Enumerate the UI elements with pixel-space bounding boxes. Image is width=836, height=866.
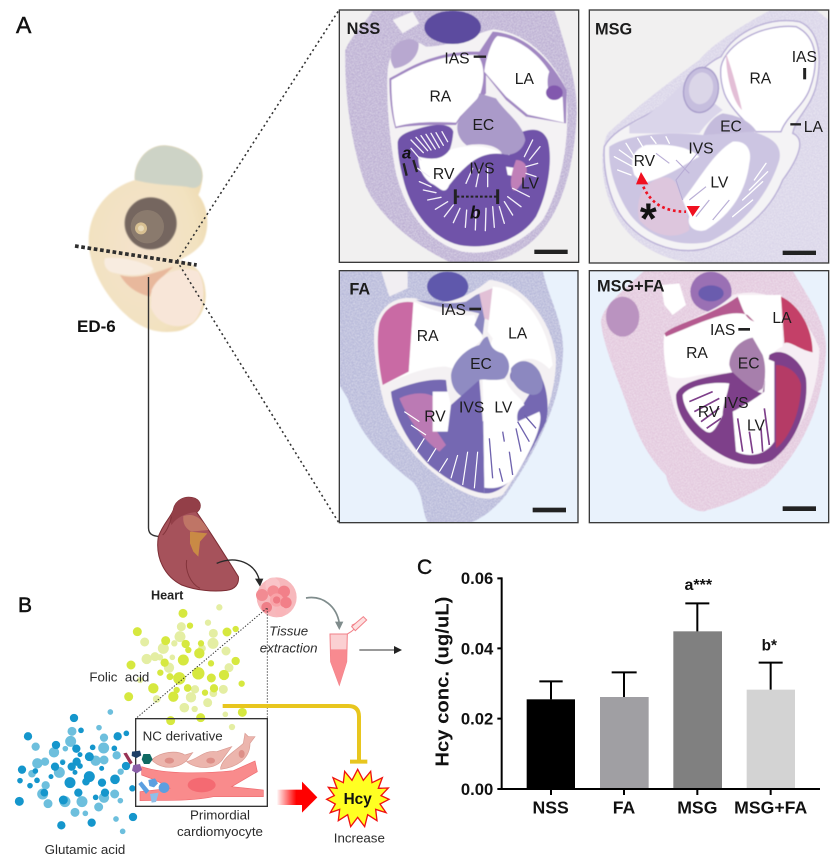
y tick labels: 0.00 bbox=[461, 780, 493, 799]
chamber labels bbox=[402, 50, 540, 222]
chamber labels: RA bbox=[417, 328, 439, 345]
atria bbox=[664, 295, 783, 378]
glutamic acid particles bbox=[15, 710, 137, 834]
icon: heart bbox=[158, 497, 238, 591]
chamber labels: LA bbox=[804, 119, 823, 136]
pericardial cavity bbox=[604, 21, 819, 250]
icon: NC derivative cells bbox=[152, 733, 255, 769]
atrial septum and EC bbox=[451, 337, 509, 400]
chamber labels: IAS bbox=[792, 49, 817, 66]
x category labels: NSS bbox=[533, 797, 569, 817]
label Increase: Increase bbox=[334, 830, 385, 845]
pericardial ring bbox=[664, 292, 819, 469]
arrow heart to tissue bbox=[217, 560, 263, 587]
icon: Hcy burst bbox=[327, 769, 389, 827]
translucent head vesicle bbox=[135, 146, 202, 188]
neck structure bbox=[629, 80, 723, 133]
dotted zoom lines from embryo to panels bbox=[177, 10, 339, 523]
label Heart: Heart bbox=[151, 588, 184, 602]
y tick labels bbox=[461, 569, 494, 799]
chamber labels: RV bbox=[698, 404, 720, 421]
trabeculae bbox=[411, 132, 540, 231]
chamber labels: IAS bbox=[710, 322, 735, 339]
inset: NC derivative and cardiomyocyte: NC derivative bbox=[143, 729, 223, 744]
chamber labels: IAS bbox=[444, 50, 470, 67]
LV cavity bbox=[483, 380, 540, 488]
right atrium blood-filled bbox=[394, 302, 482, 380]
significance labels bbox=[685, 577, 777, 655]
panel label B: B bbox=[18, 594, 32, 617]
chamber labels: LV bbox=[710, 175, 729, 192]
EC bbox=[729, 338, 765, 395]
right ventricle cavity bbox=[418, 146, 503, 191]
chamber labels: RA bbox=[686, 345, 708, 362]
chamber labels: EC bbox=[720, 119, 742, 136]
ventricle bbox=[676, 352, 807, 464]
label folic acid: Folic acid bbox=[89, 670, 149, 685]
chamber labels: LA bbox=[772, 310, 792, 327]
chamber labels: a bbox=[402, 143, 411, 162]
label tissue extraction bbox=[260, 624, 318, 655]
grey arrow to tube bbox=[306, 598, 343, 630]
y tick labels: 0.06 bbox=[461, 569, 493, 588]
cut line bbox=[75, 246, 197, 265]
significance labels: b* bbox=[762, 638, 777, 655]
chamber labels: IVS bbox=[469, 160, 495, 177]
pink lesion bbox=[638, 177, 689, 236]
red dotted arrow bbox=[636, 172, 700, 217]
bar chart: Hcy concentration bbox=[431, 569, 820, 817]
panel: FA histology bbox=[339, 271, 578, 523]
label FA: FA bbox=[349, 280, 370, 298]
pink trabeculae bbox=[399, 393, 446, 452]
panel: B schematic bbox=[15, 497, 402, 857]
x category labels: MSG+FA bbox=[734, 797, 807, 817]
y tick labels: 0.02 bbox=[461, 710, 493, 729]
scale bar bbox=[534, 250, 568, 254]
folic acid particles bbox=[125, 605, 246, 730]
icon: sample tube bbox=[330, 617, 367, 685]
chamber labels: LV bbox=[747, 418, 766, 435]
septal and roof tissue bbox=[416, 293, 486, 335]
scale bar bbox=[783, 251, 816, 255]
chamber labels: RA bbox=[429, 89, 452, 106]
panel label C: C bbox=[417, 556, 432, 579]
label primordial cardiomyocyte: cardiomyocyte bbox=[177, 824, 263, 839]
black arrow to chart bbox=[359, 646, 402, 654]
chamber labels: LA bbox=[515, 71, 534, 88]
icon: cardiomyocyte bbox=[140, 761, 263, 801]
x category labels bbox=[533, 797, 807, 817]
scale bar bbox=[783, 506, 816, 511]
x category labels: FA bbox=[613, 797, 636, 817]
chamber labels bbox=[417, 302, 528, 426]
chamber labels: RA bbox=[749, 70, 772, 87]
asterisk lesion mark: * bbox=[640, 195, 657, 243]
chamber labels: IVS bbox=[459, 399, 484, 416]
label MSG: MSG bbox=[595, 20, 632, 38]
chamber labels: LV bbox=[521, 175, 540, 192]
dotted lines from tissue to inset bbox=[136, 608, 267, 719]
chamber labels: LV bbox=[494, 399, 513, 416]
significance labels: a*** bbox=[685, 577, 713, 594]
panel: NSS histology bbox=[339, 10, 579, 263]
chamber labels: EC bbox=[470, 356, 492, 373]
chamber labels: IVS bbox=[688, 141, 714, 158]
x category labels: MSG bbox=[677, 797, 717, 817]
ventricular myocardium bbox=[398, 125, 550, 246]
label glutamic acid: Glutamic acid bbox=[45, 842, 125, 857]
chamber labels: IAS bbox=[441, 302, 466, 319]
inhibition line bbox=[223, 706, 367, 762]
IAS mark bbox=[738, 325, 750, 333]
label MSG+FA: MSG+FA bbox=[597, 278, 665, 296]
label primordial cardiomyocyte bbox=[177, 807, 263, 839]
eye bbox=[125, 197, 177, 249]
limbs bbox=[104, 258, 204, 326]
scale bar bbox=[533, 508, 566, 512]
label tissue extraction: extraction bbox=[260, 640, 318, 655]
chamber labels: IVS bbox=[723, 395, 749, 412]
chamber labels: LA bbox=[508, 325, 528, 342]
label Hcy: Hcy bbox=[344, 791, 372, 808]
left atrium bbox=[488, 287, 552, 372]
panel: MSG+FA histology bbox=[589, 271, 829, 523]
chamber labels: EC bbox=[472, 117, 494, 134]
y tick labels: 0.04 bbox=[461, 639, 494, 658]
inset: NC derivative and cardiomyocyte bbox=[123, 719, 267, 806]
pericardial cavity bbox=[374, 280, 556, 499]
RV cavity bbox=[683, 383, 729, 433]
ventricular wall bbox=[391, 380, 484, 493]
measurement marks bbox=[790, 68, 805, 124]
ventricular wall bbox=[609, 132, 780, 244]
connector line embryo to heart bbox=[148, 277, 169, 537]
error bars bbox=[539, 603, 783, 699]
endocardial cushion bbox=[457, 93, 525, 155]
icon: tissue cluster bbox=[256, 577, 297, 617]
label primordial cardiomyocyte: Primordial bbox=[190, 807, 250, 822]
label tissue extraction: Tissue bbox=[269, 624, 308, 639]
atrium bbox=[721, 26, 815, 132]
IAS mark bbox=[469, 305, 481, 313]
LV cavity bbox=[733, 358, 774, 455]
panel: MSG histology bbox=[589, 10, 829, 263]
chamber labels: EC bbox=[738, 356, 760, 373]
cavities bbox=[632, 145, 699, 183]
embryo photo bbox=[75, 146, 207, 332]
chamber labels: RV bbox=[634, 153, 656, 170]
measurement marks bbox=[404, 57, 498, 204]
panel label A: A bbox=[16, 12, 32, 38]
label NSS: NSS bbox=[347, 20, 380, 38]
tissue outline bbox=[345, 10, 577, 263]
red arrow bbox=[277, 782, 317, 813]
bars bbox=[527, 631, 795, 789]
chamber labels: RV bbox=[433, 166, 455, 183]
atria walls bbox=[389, 32, 567, 128]
chamber labels: RV bbox=[424, 409, 446, 426]
chamber labels: b bbox=[470, 202, 481, 222]
molecules bbox=[123, 753, 133, 765]
y axis title: Hcy conc. (ug/uL) bbox=[431, 597, 452, 767]
chamber labels bbox=[686, 310, 792, 435]
label ED-6: ED-6 bbox=[77, 317, 116, 336]
chamber labels bbox=[634, 49, 823, 192]
axes bbox=[497, 577, 820, 795]
